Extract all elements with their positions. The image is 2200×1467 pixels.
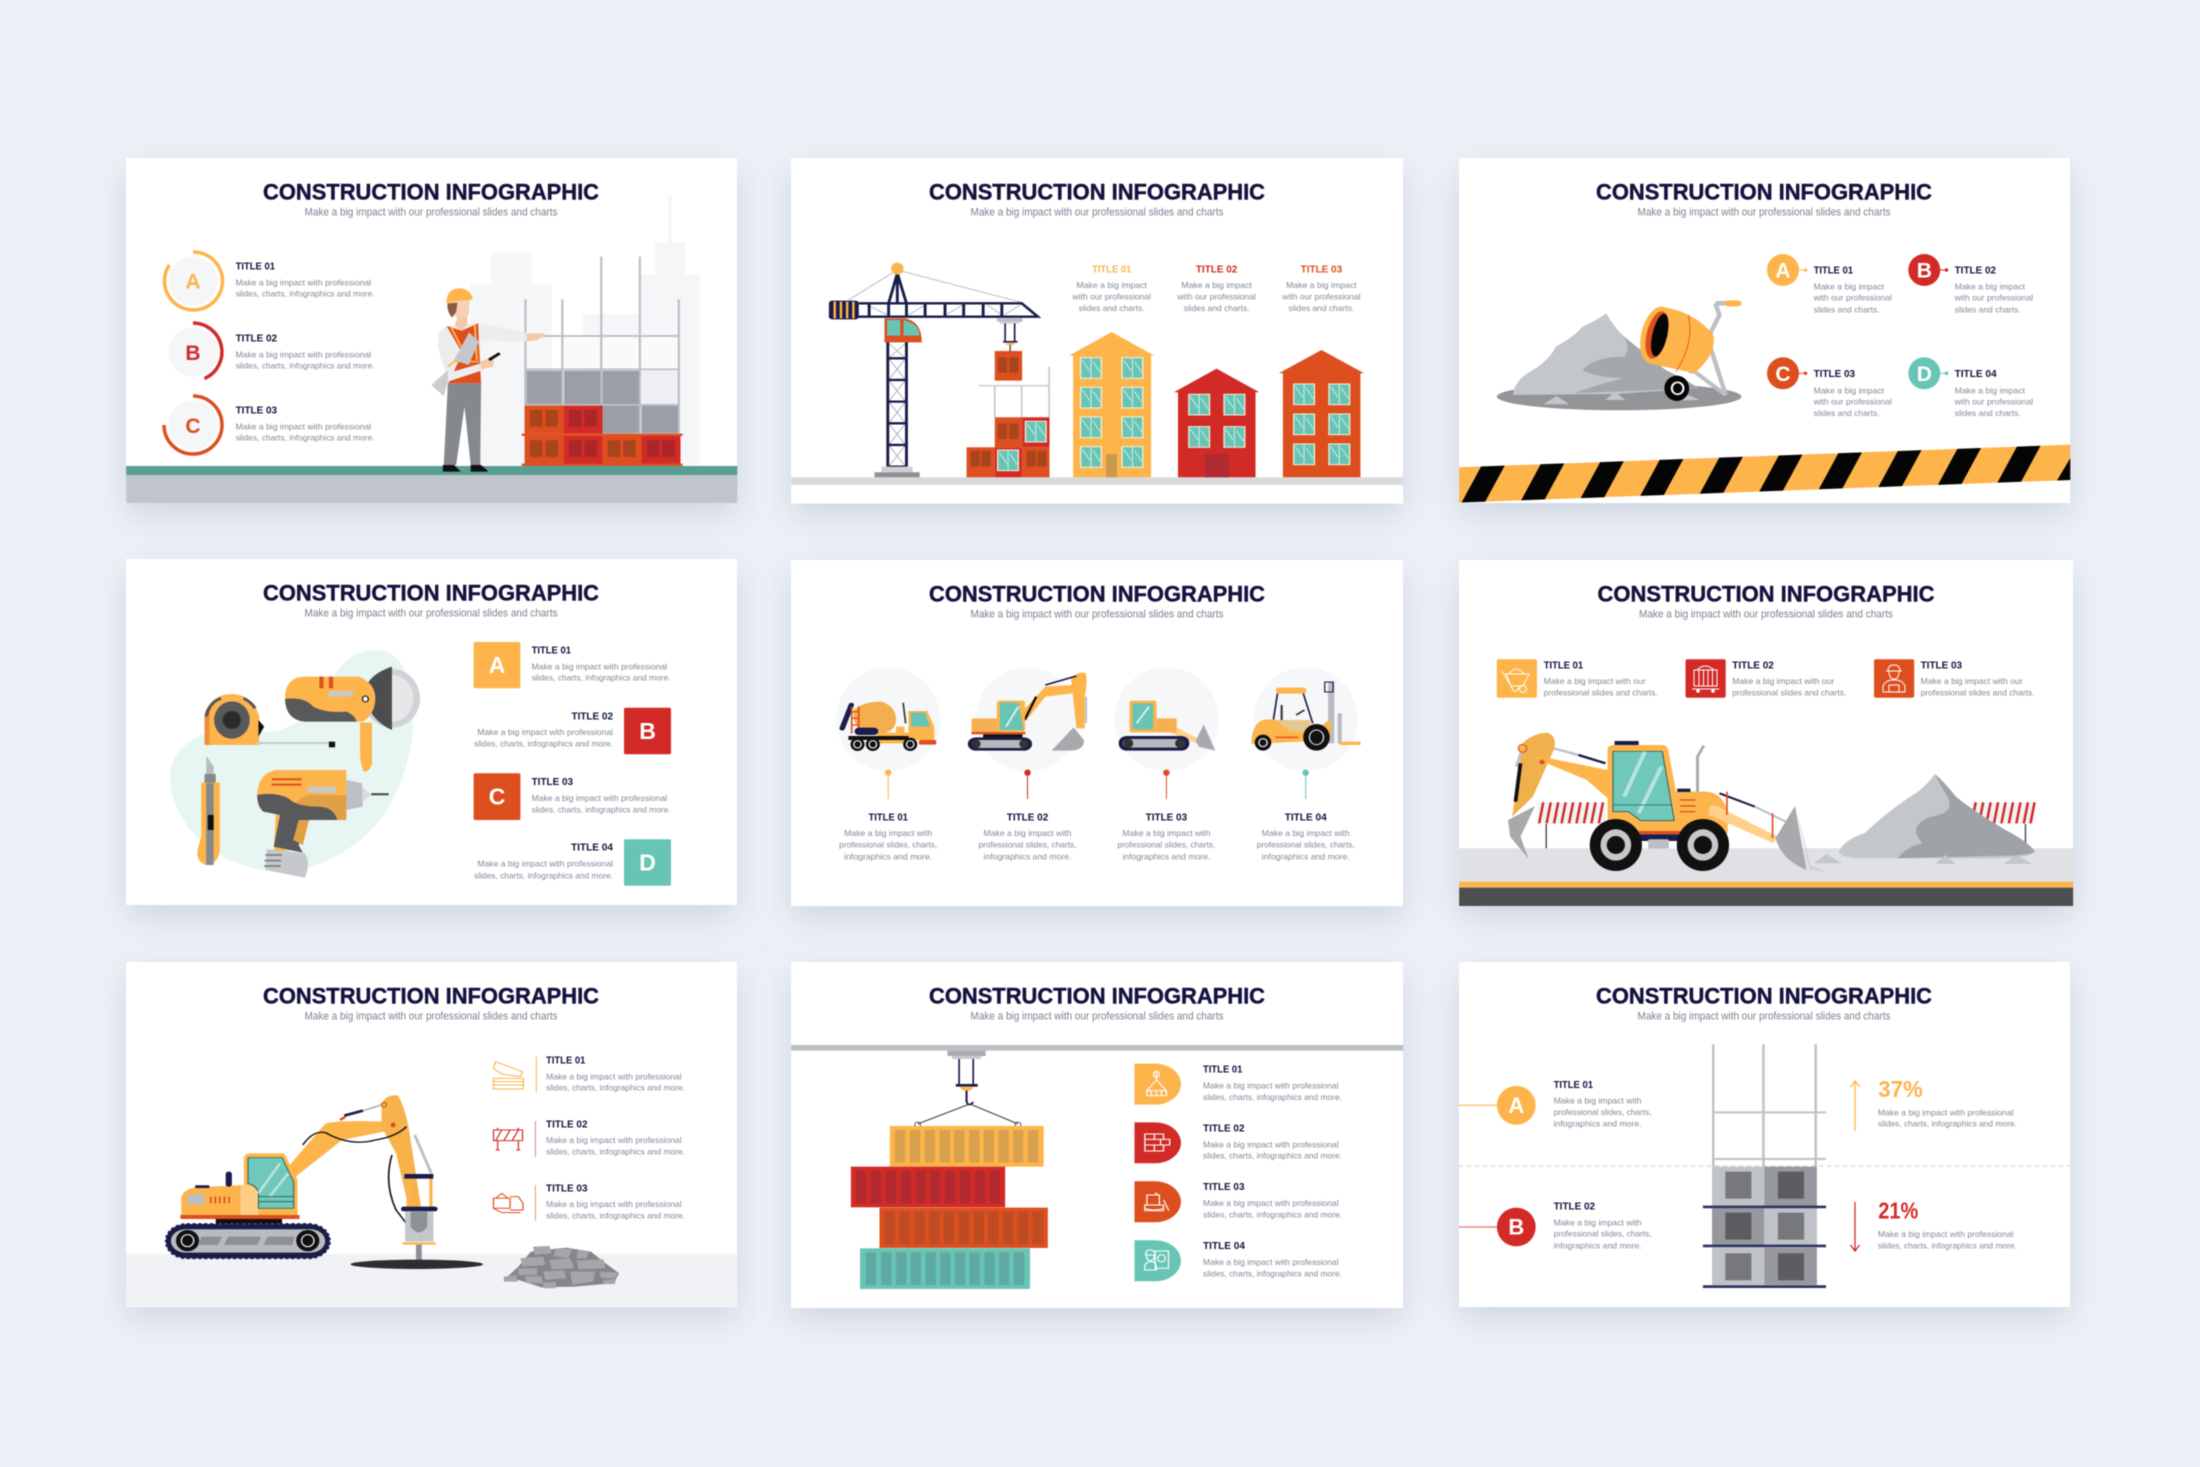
text block: title 03 [1281, 263, 1361, 313]
badge B [1908, 254, 1948, 286]
tab icon 4: engineer and blueprint [1134, 1240, 1181, 1281]
text block: title 04 [1203, 1240, 1342, 1278]
icon: dump truck [494, 1193, 523, 1213]
icon: barrier [494, 1128, 523, 1150]
text block: title 03: TITLE 03 [1814, 368, 1855, 380]
square C: C [489, 784, 505, 810]
panel 3: cement mixer and hazard tape [1459, 158, 2070, 503]
text block: title 03: slides, charts, infographics and more. [236, 433, 375, 443]
text block: title 02 [546, 1119, 685, 1156]
text block: title 02: professional slides, charts, [1554, 1229, 1652, 1239]
badge A with leader line [1459, 1086, 1536, 1125]
text block: title 01 [532, 644, 671, 683]
text block: title 04 [1257, 811, 1355, 861]
text block: title 03: TITLE 03 [236, 405, 277, 417]
panel 9: building percentages [1459, 962, 2070, 1307]
text block: title 03: with our professional [1813, 397, 1892, 407]
text block: title 01: Make a big impact with [1554, 1096, 1642, 1106]
text block: title 03: TITLE 03 [546, 1183, 588, 1195]
badge B with leader line [1459, 1208, 1536, 1246]
stat 37% [1878, 1076, 2017, 1129]
text block: title 02: slides and charts. [1955, 304, 2021, 314]
text block: title 02: Make a big impact with professional [236, 349, 371, 359]
text block: title 01: professional slides, charts, [1554, 1107, 1652, 1117]
text block: title 02: TITLE 02 [546, 1119, 588, 1131]
text block: title 03: Make a big impact [1814, 385, 1885, 395]
text block: title 01: TITLE 01 [1814, 264, 1853, 276]
text block: title 02 [978, 811, 1076, 861]
panel 6: backhoe loader [1459, 560, 2073, 906]
panel 8 subtitle: Make a big impact with our professional slides and charts [970, 1011, 1224, 1023]
text block: title 01: professional slides, charts, [839, 840, 937, 850]
text block: title 03: professional slides and charts. [1921, 687, 2035, 697]
text block: title 01: professional slides and charts. [1544, 687, 1658, 697]
icon: excavator [968, 673, 1087, 751]
panel 5: four vehicles [791, 560, 1403, 906]
arrow down [1850, 1202, 1860, 1251]
text block: title 02: professional slides, charts, [978, 840, 1076, 850]
text block: title 04: TITLE 04 [571, 842, 613, 854]
text block: title 03: Make a big impact with professional [236, 421, 371, 431]
text block: title 01: TITLE 01 [868, 811, 908, 823]
panel 5 subtitle: Make a big impact with our professional slides and charts [970, 609, 1224, 621]
text block: title 02 [1554, 1201, 1652, 1250]
text block: title 01 [1203, 1063, 1342, 1102]
text block: title 03: with our professional [1281, 292, 1361, 302]
panel 9 title: CONSTRUCTION INFOGRAPHIC [1596, 983, 1932, 1008]
panel 7 title: CONSTRUCTION INFOGRAPHIC [263, 983, 599, 1008]
illustration: concrete mound and mixer [1497, 300, 1741, 410]
ring A: A [185, 271, 201, 294]
stat 37%: slides, charts, infographics and more. [1878, 1119, 2017, 1129]
panel 5 card [791, 560, 1403, 906]
text block: title 01: slides, charts, infographics and more. [546, 1083, 685, 1093]
text block: title 02 [1176, 263, 1256, 313]
text block: title 03: slides and charts. [1814, 408, 1880, 418]
icon: bulldozer [1119, 701, 1215, 751]
text block: title 03 [1813, 368, 1892, 418]
text block: title 02: slides, charts, infographics and more. [474, 738, 613, 748]
text block: title 02 [474, 710, 613, 748]
badge A: A [1775, 260, 1791, 282]
ring A [164, 252, 222, 310]
stat 37%: Make a big impact with professional [1878, 1107, 2014, 1117]
panel 8 title: CONSTRUCTION INFOGRAPHIC [929, 983, 1265, 1008]
vertical rule 1 [535, 1057, 537, 1093]
text block: title 04: TITLE 04 [1203, 1240, 1245, 1252]
text block: title 01: Make a big impact with professional [532, 661, 667, 671]
text block: title 03: Make a big impact with professional [532, 793, 667, 803]
badge C: C [1775, 363, 1791, 386]
panel 6 subtitle: Make a big impact with our professional slides and charts [1639, 609, 1893, 621]
panel 2: crane and buildings [791, 158, 1403, 504]
panel 3 subtitle: Make a big impact with our professional slides and charts [1638, 207, 1891, 219]
text block: title 02: infographics and more. [1554, 1240, 1642, 1250]
text block: title 02 [1203, 1122, 1342, 1161]
text block: title 02: with our professional [1176, 292, 1256, 302]
text block: title 01: slides, charts, infographics and more. [236, 289, 375, 299]
text block: title 04: Make a big impact with professional [1203, 1257, 1339, 1267]
text block: title 02: slides and charts. [1184, 303, 1250, 313]
panel 6 title: CONSTRUCTION INFOGRAPHIC [1598, 582, 1934, 607]
text block: title 03: Make a big impact with [1122, 828, 1211, 838]
text block: title 03: TITLE 03 [1921, 660, 1962, 672]
panel 9 card [1459, 962, 2070, 1307]
square C [474, 773, 520, 820]
text block: title 01: Make a big impact with professional [1203, 1080, 1339, 1090]
text block: title 01 [839, 811, 937, 861]
text block: title 01: Make a big impact with our [1544, 676, 1646, 686]
icon: worker [1874, 659, 1914, 698]
text block: title 03: Make a big impact [1286, 280, 1357, 290]
icon: wheelbarrow [1497, 659, 1537, 698]
text block: title 02 [1732, 660, 1846, 697]
text block: title 04: professional slides, charts, [1257, 840, 1355, 850]
icon: mine cart [1686, 659, 1726, 698]
arrow up [1850, 1081, 1860, 1131]
illustration: beam, hook and container stack [791, 1045, 1403, 1289]
ring C: C [185, 415, 201, 438]
text block: title 02: TITLE 02 [572, 710, 613, 722]
text block: title 02: TITLE 02 [1007, 811, 1048, 823]
text block: title 02: Make a big impact [1955, 281, 2026, 291]
panel 1 card [126, 158, 737, 503]
text block: title 01 [546, 1055, 685, 1093]
stat 37%: 37% [1878, 1076, 1923, 1102]
text block: title 03: infographics and more. [1122, 851, 1210, 861]
text block: title 01: slides, charts, infographics and more. [1203, 1092, 1342, 1102]
text block: title 04: TITLE 04 [1285, 811, 1327, 823]
ring B: B [185, 342, 201, 365]
text block: title 04: slides, charts, infographics and more. [1203, 1268, 1342, 1278]
vehicle backdrops and pins [836, 667, 1358, 799]
text block: title 01: infographics and more. [844, 851, 932, 861]
text block: title 02: Make a big impact with [984, 828, 1072, 838]
text block: title 04: Make a big impact [1955, 385, 2026, 395]
illustration: city, scaffold, bricks and worker [126, 195, 737, 503]
ring C [164, 396, 222, 454]
panel 2 title: CONSTRUCTION INFOGRAPHIC [929, 179, 1265, 204]
text block: title 03: slides and charts. [1288, 303, 1354, 313]
text block: title 03: Make a big impact with professional [546, 1199, 682, 1209]
text block: title 02: TITLE 02 [1732, 660, 1774, 672]
illustration: tower crane, blocks and three buildings [791, 263, 1403, 485]
panel 8 card [791, 962, 1403, 1308]
panel 9 subtitle: Make a big impact with our professional slides and charts [1638, 1011, 1891, 1023]
text block: title 03 [1117, 811, 1215, 861]
text block: title 02 [236, 333, 375, 371]
text block: title 01: slides and charts. [1079, 303, 1145, 313]
text block: title 02: TITLE 02 [1203, 1122, 1245, 1134]
square A: A [489, 652, 505, 678]
text block: title 03 [532, 776, 671, 814]
text block: title 04: slides and charts. [1955, 408, 2021, 418]
text block: title 02: professional slides and charts. [1732, 687, 1846, 697]
text block: title 04: slides, charts, infographics and more. [474, 870, 613, 880]
badge D [1908, 357, 1948, 389]
tab icon 2: brick wall [1134, 1122, 1181, 1163]
text block: title 02: TITLE 02 [1955, 264, 1996, 276]
icon: concrete mixer truck [842, 702, 936, 751]
ring B [168, 323, 222, 379]
panel 8: hanging containers [791, 962, 1403, 1308]
square D [624, 839, 671, 886]
text block: title 02: Make a big impact [1181, 280, 1253, 290]
text block: title 02 [1954, 264, 2033, 314]
text block: title 02: TITLE 02 [1196, 263, 1237, 275]
text block: title 02: slides, charts, infographics and more. [1203, 1151, 1342, 1161]
text block: title 01 [1071, 263, 1151, 313]
panel 1 subtitle: Make a big impact with our professional slides and charts [304, 207, 558, 219]
panel 4 card [126, 559, 737, 905]
text block: title 02: infographics and more. [984, 851, 1072, 861]
text block: title 04 [1954, 368, 2033, 418]
text block: title 02: Make a big impact with professional [1203, 1139, 1339, 1149]
text block: title 01 [1813, 264, 1892, 314]
text block: title 03 [1203, 1181, 1342, 1219]
text block: title 04: infographics and more. [1262, 851, 1350, 861]
text block: title 03: TITLE 03 [1146, 811, 1187, 823]
panel 4 title: CONSTRUCTION INFOGRAPHIC [263, 581, 599, 606]
panel 1 title: CONSTRUCTION INFOGRAPHIC [263, 179, 599, 204]
text block: title 02: Make a big impact with professional [477, 727, 613, 737]
square A [474, 642, 520, 688]
text block: title 04: with our professional [1954, 397, 2033, 407]
text block: title 03: Make a big impact with our [1921, 676, 2023, 686]
text block: title 01: slides and charts. [1814, 304, 1880, 314]
text block: title 03: slides, charts, infographics and more. [546, 1210, 685, 1220]
text block: title 01: TITLE 01 [532, 644, 571, 656]
stat 21%: Make a big impact with professional [1878, 1229, 2014, 1239]
badge C [1767, 357, 1807, 389]
stat 21%: 21% [1878, 1198, 1918, 1224]
text block: title 02: Make a big impact with [1554, 1217, 1642, 1227]
text block: title 01: Make a big impact [1076, 280, 1148, 290]
text block: title 01: Make a big impact with [844, 828, 933, 838]
panel 7: jackhammer excavator [126, 962, 737, 1307]
badge A [1767, 254, 1807, 286]
text block: title 03: slides, charts, infographics and more. [532, 804, 671, 814]
text block: title 03 [236, 405, 375, 443]
stat 21%: slides, charts, infographics and more. [1878, 1240, 2017, 1250]
text block: title 02: Make a big impact with professional [546, 1135, 682, 1145]
panel 3 card [1459, 158, 2070, 503]
icon: saw and planks [494, 1062, 523, 1089]
text block: title 01: TITLE 01 [1544, 660, 1583, 672]
text block: title 04: Make a big impact with [1262, 828, 1350, 838]
badge D: D [1917, 363, 1932, 386]
vertical rule 3 [534, 1185, 536, 1221]
vertical rule 2 [534, 1121, 536, 1157]
text block: title 01: Make a big impact with professional [546, 1071, 682, 1081]
illustration: excavator, hole and rocks [126, 1095, 737, 1307]
text block: title 01: TITLE 01 [1092, 263, 1132, 275]
text block: title 01 [1544, 660, 1658, 697]
illustration: building under construction [1703, 1044, 1826, 1287]
text block: title 03: TITLE 03 [1301, 263, 1342, 275]
text block: title 03: TITLE 03 [1203, 1181, 1245, 1193]
square D: D [639, 850, 656, 876]
text block: title 01: TITLE 01 [1554, 1079, 1593, 1091]
panel 5 title: CONSTRUCTION INFOGRAPHIC [929, 582, 1265, 607]
text block: title 01 [1554, 1079, 1652, 1129]
text block: title 02: TITLE 02 [1554, 1201, 1595, 1213]
text block: title 03 [1921, 660, 2035, 697]
panel 7 subtitle: Make a big impact with our professional slides and charts [304, 1011, 558, 1023]
illustration: road, barriers, backhoe and mound [1459, 733, 2073, 906]
text block: title 01: TITLE 01 [1203, 1063, 1243, 1075]
panel 2 subtitle: Make a big impact with our professional slides and charts [970, 207, 1224, 219]
text block: title 03 [546, 1183, 685, 1220]
square B [624, 708, 671, 754]
stat 21% [1878, 1198, 2017, 1250]
panel 4 subtitle: Make a big impact with our professional slides and charts [304, 608, 558, 620]
text block: title 04 [474, 842, 613, 880]
text block: title 01: Make a big impact [1814, 281, 1885, 291]
text block: title 02: slides, charts, infographics and more. [236, 361, 375, 371]
text block: title 03: TITLE 03 [532, 776, 573, 788]
illustration: tools on mint blob [170, 650, 420, 878]
square B: B [639, 718, 656, 744]
panel 4: power tools [126, 559, 737, 905]
text block: title 04: Make a big impact with professional [477, 859, 613, 869]
badge B: B [1917, 260, 1932, 282]
tab icon 3: bulldozer [1134, 1181, 1181, 1222]
panel 2 card [791, 158, 1403, 504]
text block: title 01: TITLE 01 [236, 260, 275, 272]
badge B with leader line: B [1508, 1215, 1524, 1240]
text block: title 03: Make a big impact with professional [1203, 1198, 1339, 1208]
text block: title 01: with our professional [1813, 293, 1892, 303]
text block: title 02: slides, charts, infographics and more. [546, 1146, 685, 1156]
panel 3 title: CONSTRUCTION INFOGRAPHIC [1596, 179, 1932, 204]
text block: title 01: Make a big impact with professional [236, 277, 371, 287]
text block: title 03: professional slides, charts, [1117, 840, 1215, 850]
text block: title 01: slides, charts, infographics and more. [532, 673, 671, 683]
text block: title 02: with our professional [1954, 293, 2033, 303]
text block: title 01: with our professional [1071, 292, 1151, 302]
icon: forklift [1251, 682, 1360, 751]
panel 1: worker and A B C rings [126, 158, 737, 503]
text block: title 01 [236, 260, 375, 299]
text block: title 04: TITLE 04 [1955, 368, 1997, 380]
panel 7 card [126, 962, 737, 1307]
hazard tape [1459, 445, 2070, 503]
text block: title 02: Make a big impact with our [1732, 676, 1835, 686]
tab icon 1: crane load [1134, 1064, 1181, 1105]
panel 6 card [1459, 560, 2073, 906]
badge A with leader line: A [1508, 1093, 1524, 1118]
text block: title 03: slides, charts, infographics and more. [1203, 1209, 1342, 1219]
text block: title 01: TITLE 01 [546, 1055, 586, 1067]
text block: title 02: TITLE 02 [236, 333, 277, 345]
text block: title 01: infographics and more. [1554, 1119, 1642, 1129]
